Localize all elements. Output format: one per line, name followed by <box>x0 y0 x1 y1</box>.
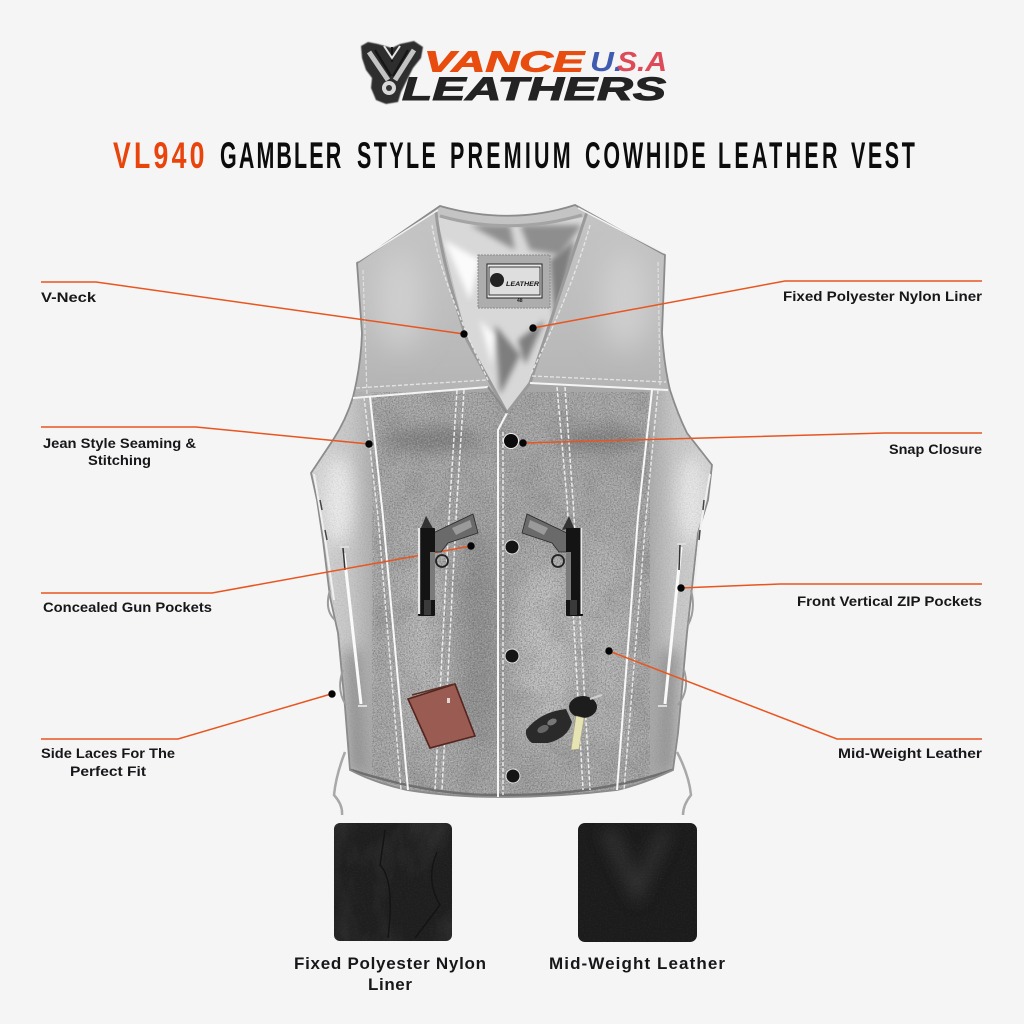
label: Concealed Gun Pockets: Concealed Gun Pockets <box>43 599 212 615</box>
caption: Fixed Polyester Nylon Liner: Liner <box>368 975 412 994</box>
label: V-Neck: V-Neck <box>41 289 96 305</box>
bottom hem shadow <box>345 768 678 795</box>
swatch: mid-weight leather <box>577 822 698 943</box>
label: Mid-Weight Leather: Mid-Weight Leather <box>838 745 983 761</box>
swatch: nylon liner <box>333 822 453 942</box>
wordmark: U.S.A <box>590 46 667 77</box>
brand neck label: LEATHER <box>506 282 540 288</box>
chest stitching columns <box>435 387 590 790</box>
label: Jean Style Seaming & Stitching <box>43 435 196 468</box>
line: Fixed Polyester Nylon Liner <box>533 281 982 328</box>
label: Side Laces For The Perfect Fit: Side Laces For The <box>41 745 175 761</box>
caption: Mid-Weight Leather: Mid-Weight Leather <box>549 954 725 973</box>
title: VL940 <box>113 135 204 176</box>
label: Side Laces For The Perfect Fit <box>41 745 175 779</box>
neck stitching <box>432 225 590 380</box>
brand neck label: 48 <box>517 298 523 304</box>
line: Snap Closure <box>522 433 982 443</box>
title: GAMBLER <box>220 136 341 177</box>
side lace edges <box>314 474 710 610</box>
icon: left pistol <box>418 514 478 616</box>
line: V-Neck <box>41 282 464 334</box>
title: STYLE <box>357 136 436 177</box>
icon: right pistol <box>522 514 583 616</box>
title <box>113 135 915 177</box>
line: Mid-Weight Leather <box>609 651 982 739</box>
vest outline <box>311 205 712 797</box>
caption: Fixed Polyester Nylon Liner <box>294 954 486 994</box>
label: Side Laces For The Perfect Fit: Perfect Fit <box>70 763 146 779</box>
caption: Fixed Polyester Nylon Liner: Fixed Polyester Nylon <box>294 954 486 973</box>
title: PREMIUM <box>450 136 571 177</box>
label: Fixed Polyester Nylon Liner: Fixed Polyester Nylon Liner <box>783 288 983 304</box>
wordmark: U.S.A: U. <box>590 46 623 77</box>
line: Front Vertical ZIP Pockets <box>680 584 982 588</box>
callout lines <box>41 281 982 739</box>
snap buttons <box>503 433 520 783</box>
vest <box>300 180 725 815</box>
icon: car keys <box>526 695 602 750</box>
lower side laces <box>334 752 691 815</box>
chest shading <box>380 428 480 452</box>
side panel seams <box>370 390 652 790</box>
line: Side Laces <box>41 694 331 739</box>
label: Snap Closure: Snap Closure <box>889 441 982 457</box>
line: Jean Style Seaming <box>41 427 369 444</box>
label: Jean Style Seaming & Stitching: Jean Style Seaming & <box>43 435 196 451</box>
label: Front Vertical ZIP Pockets: Front Vertical ZIP Pockets <box>797 593 982 609</box>
neck liner edges <box>436 212 587 413</box>
icon: engine <box>361 41 423 104</box>
title: COWHIDE <box>585 136 706 177</box>
icon: brown wallet <box>408 684 475 748</box>
wordmark: Vance: VANCE <box>424 46 587 78</box>
vest body <box>312 206 711 796</box>
yoke seams <box>353 383 668 398</box>
placket <box>498 413 507 797</box>
title: LEATHER <box>718 136 838 177</box>
wordmark: Leathers: LEATHERS <box>402 71 667 107</box>
title: VEST <box>851 136 915 177</box>
side zip pockets <box>344 547 681 704</box>
logo: Vance Leathers USA <box>361 41 667 107</box>
callout dots <box>328 324 685 698</box>
wordmark: U.S.A: S.A <box>617 46 667 77</box>
neck liner <box>438 218 584 410</box>
leather grain <box>372 392 650 800</box>
brand neck label <box>478 255 550 308</box>
yoke panels <box>354 206 669 397</box>
outline and seams <box>311 205 712 797</box>
label: Jean Style Seaming & Stitching: Stitching <box>88 452 151 468</box>
line: Concealed Gun Pockets <box>41 546 471 593</box>
